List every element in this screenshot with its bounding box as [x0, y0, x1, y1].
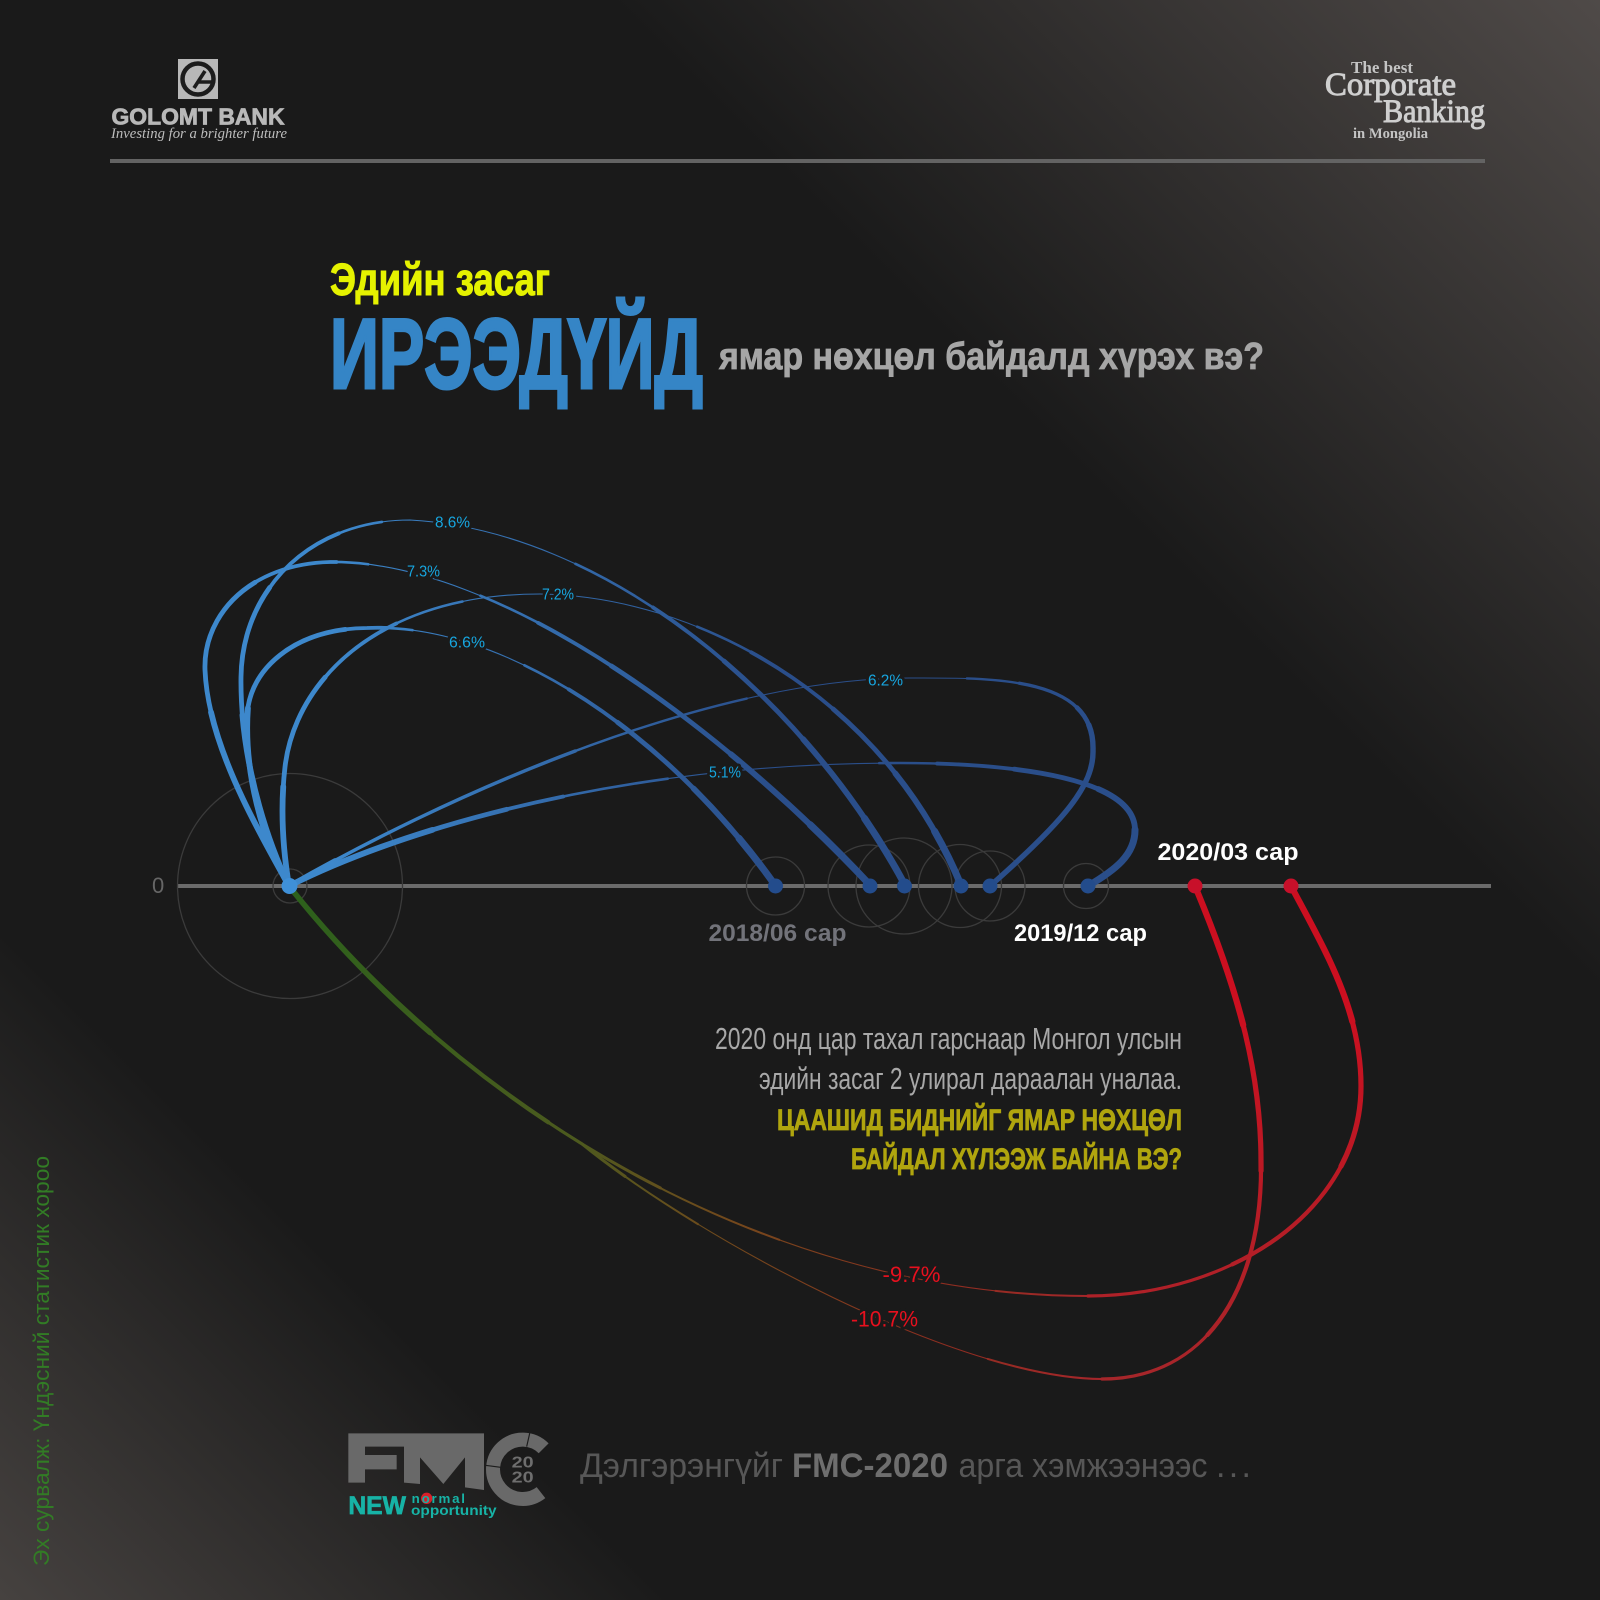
footer rest: арга хэмжээнээс	[958, 1447, 1208, 1485]
logo: The best Corporate Banking in Mongolia	[1325, 58, 1485, 142]
footer bold: FMC-2020	[792, 1447, 948, 1485]
arc: decline -10.7%	[289, 886, 1261, 1379]
date labels: 2019/12 сар	[1014, 920, 1147, 947]
growth value labels: 7.3%	[407, 564, 440, 580]
data points	[282, 878, 1298, 894]
arc: growth 8.6%	[241, 520, 905, 886]
axis zero label: 0	[152, 873, 164, 898]
decline value labels: -10.7%	[851, 1306, 918, 1332]
decline value labels	[851, 1262, 940, 1332]
bank name: GOLOMT BANK	[112, 104, 285, 130]
footer call to action	[580, 1447, 1251, 1485]
arc: growth 5.1%	[289, 763, 1135, 886]
footer word: Дэлгэрэнгүйг	[580, 1447, 783, 1485]
2020 in C: 20	[512, 1469, 534, 1486]
date labels: 2020/03 сар	[1158, 839, 1298, 866]
growth value labels: 7.2%	[542, 586, 574, 604]
callout line 2: эдийн засаг 2 улирал дараалан уналаа.	[759, 1061, 1182, 1096]
zero axis	[152, 873, 1491, 898]
callout line 1: 2020 онд цар тахал гарснаар Монгол улсын	[715, 1021, 1182, 1056]
logo: FMC 2020	[348, 1432, 544, 1520]
growth value labels	[407, 514, 903, 782]
date labels	[708, 839, 1298, 947]
source note: Эх сурвалж: Үндэсний статистик хороо	[29, 1156, 54, 1566]
growth value labels: 6.6%	[449, 634, 485, 652]
date labels: 2018/06 сар	[708, 920, 846, 947]
arc: growth 6.6%	[247, 628, 775, 886]
NEW word: NEW	[348, 1492, 406, 1520]
normal opportunity words	[411, 1491, 497, 1518]
title line: economy: Эдийн засаг	[330, 254, 550, 305]
icon: Golomt emblem	[178, 59, 218, 99]
2020 in C: 20	[512, 1454, 534, 1471]
2020 in C	[512, 1454, 534, 1486]
normal opportunity words: normal	[412, 1491, 465, 1506]
growth value labels: 5.1%	[709, 764, 741, 782]
bubble rings	[178, 774, 1108, 998]
normal opportunity words: opportunity	[411, 1502, 497, 1518]
chart: GDP growth arcs	[152, 514, 1491, 1379]
footer dots: . . .	[1216, 1447, 1251, 1485]
FM letters	[348, 1433, 484, 1490]
callout question line 1: ЦААШИД БИДНИЙГ ЯМАР НӨХЦӨЛ	[777, 1103, 1182, 1137]
decline value labels: -9.7%	[882, 1262, 940, 1287]
award line 1: The best	[1351, 58, 1414, 77]
award line 4: in Mongolia	[1353, 126, 1429, 142]
callout text	[715, 1021, 1182, 1176]
logo: Golomt Bank	[110, 59, 288, 142]
arc: decline -9.7%	[289, 886, 1361, 1296]
callout question line 2: БАЙДАЛ ХҮЛЭЭЖ БАЙНА ВЭ?	[851, 1142, 1182, 1176]
heading	[330, 254, 1264, 409]
icon: virus	[421, 1493, 432, 1504]
arc: growth 7.3%	[205, 562, 870, 886]
award line 3: Banking	[1383, 94, 1485, 130]
title line: question: ямар нөхцөл байдалд хүрэх вэ?	[718, 336, 1264, 378]
title line: future: ИРЭЭДҮЙД	[330, 298, 703, 409]
growth value labels: 6.2%	[868, 672, 903, 690]
arc: growth 7.2%	[282, 594, 961, 886]
C letter	[485, 1432, 544, 1499]
growth value labels: 8.6%	[435, 514, 470, 532]
award line 2: Corporate	[1325, 67, 1456, 103]
arc: growth 6.2%	[289, 678, 1093, 886]
bank slogan: Investing for a brighter future	[110, 126, 288, 142]
